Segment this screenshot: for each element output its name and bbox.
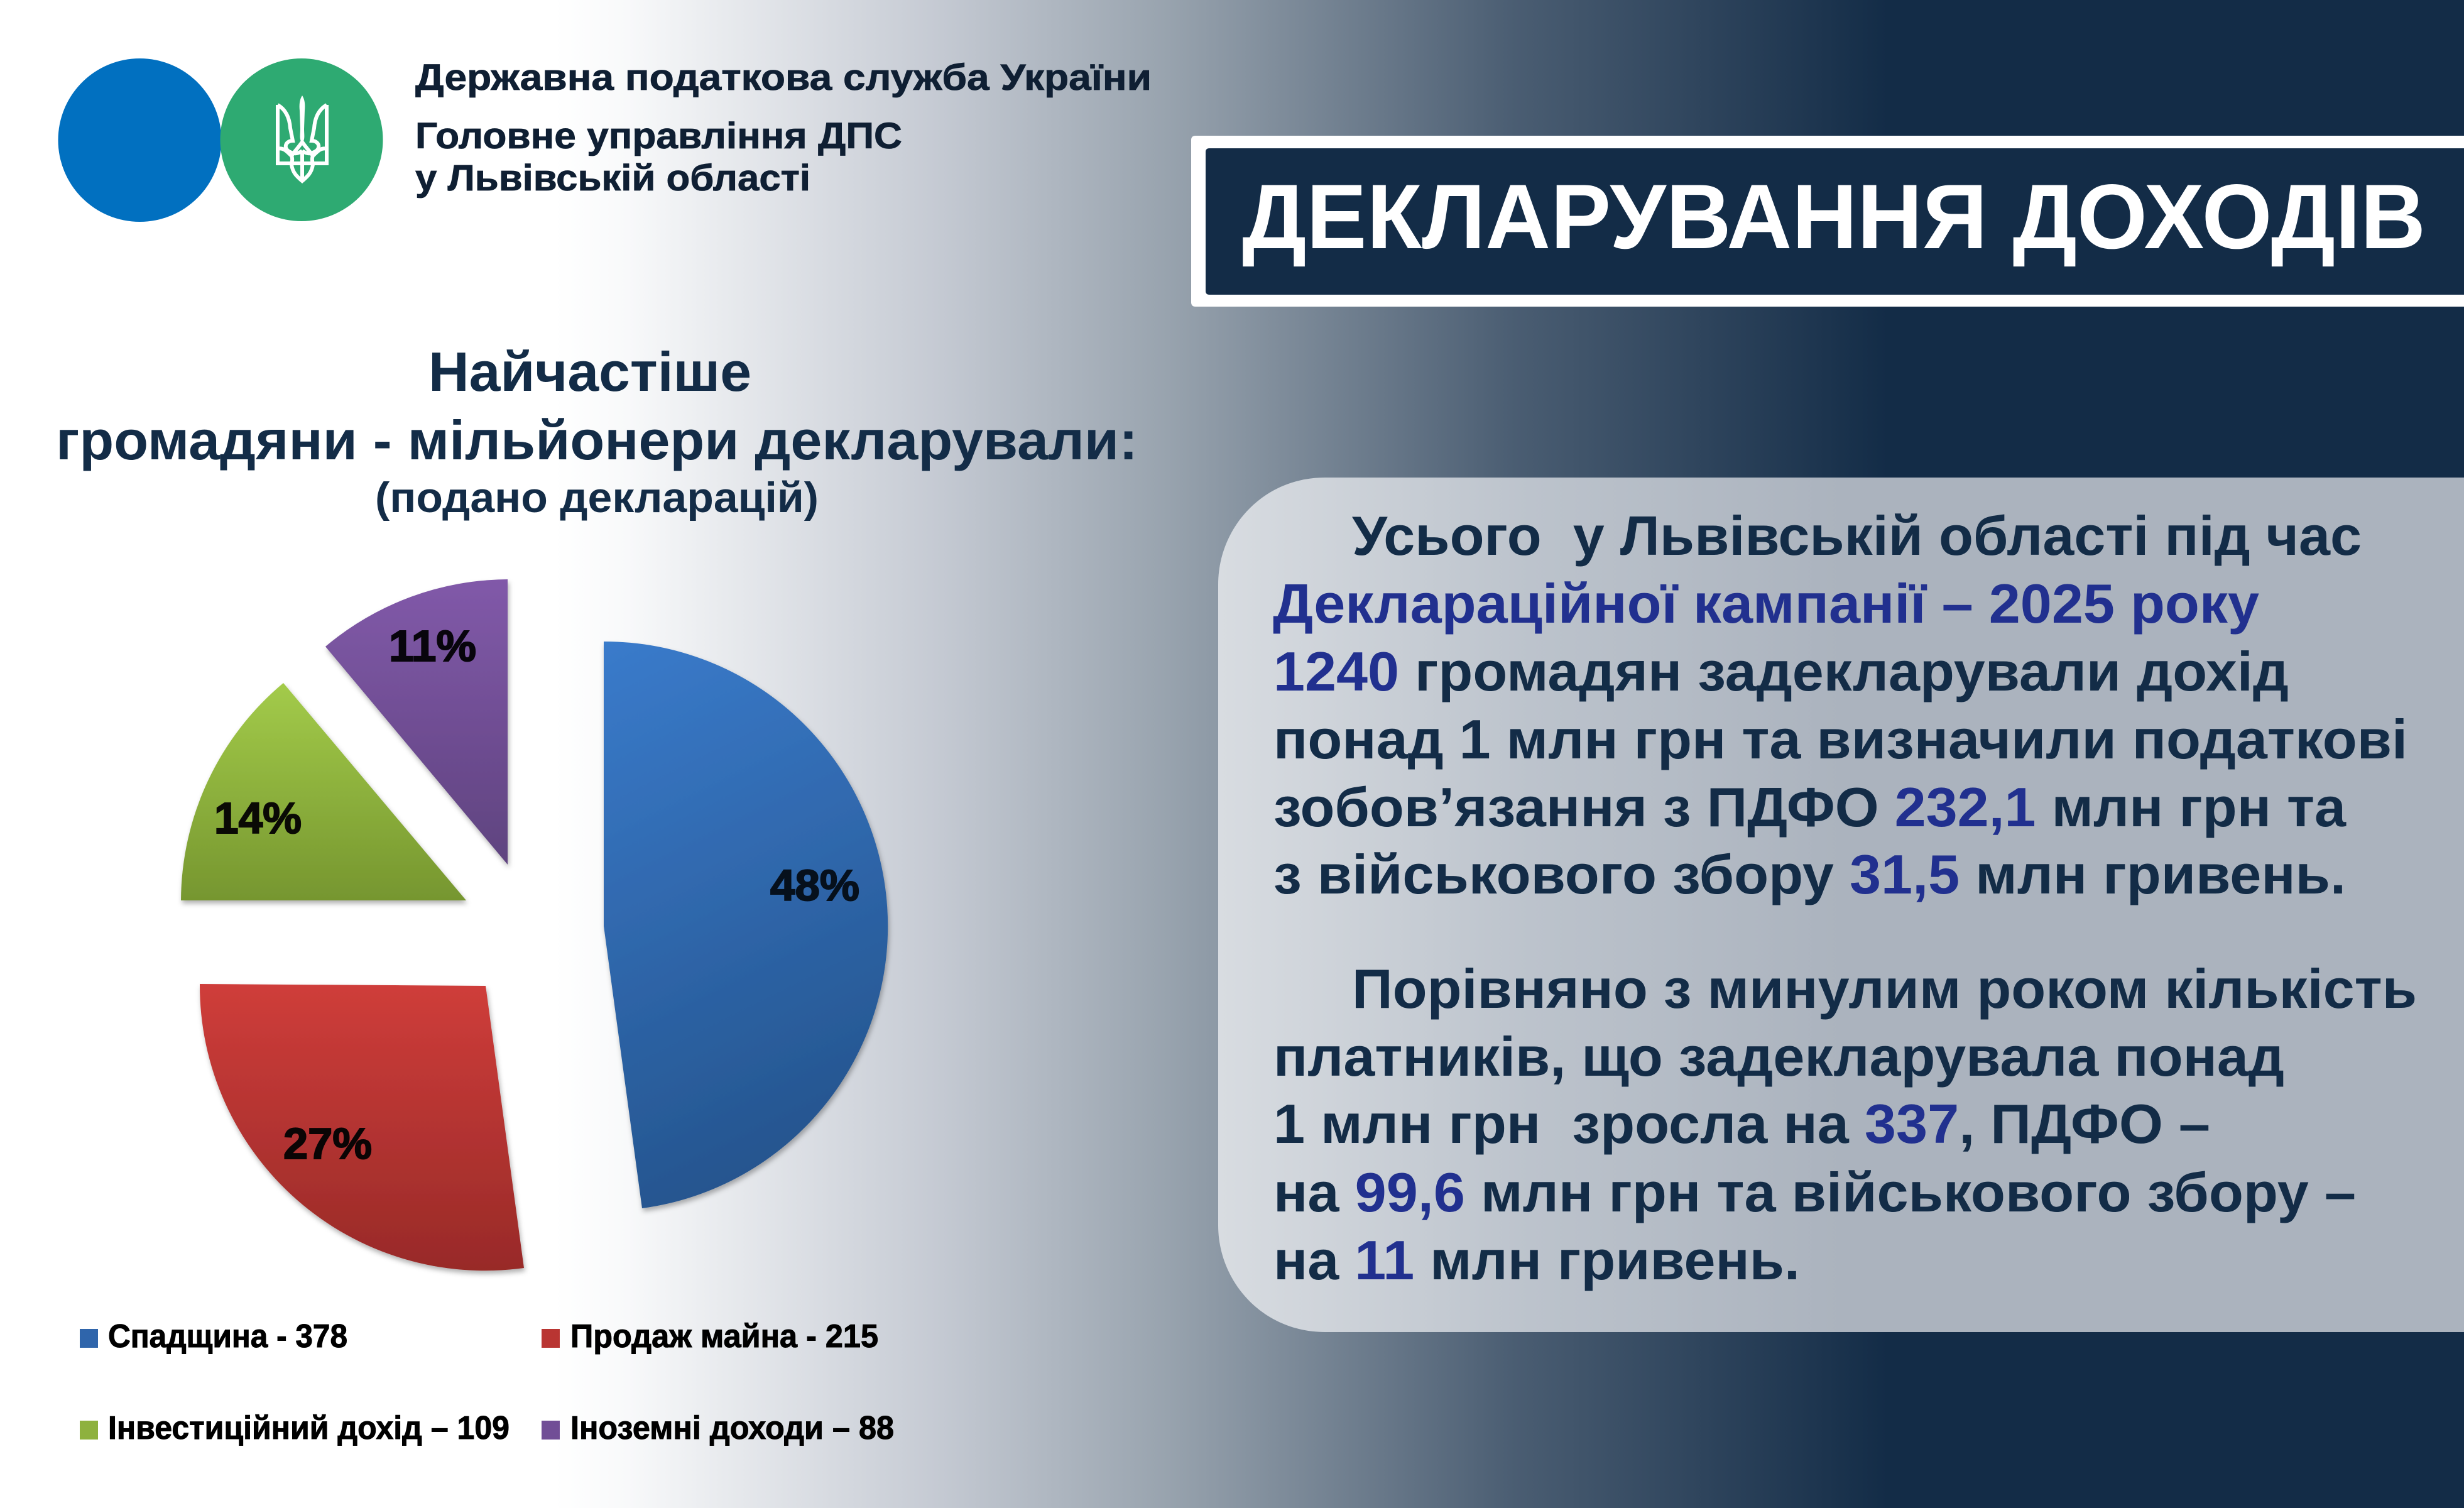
icon: trident (278, 96, 327, 181)
slice: investment income 14%: 14% (214, 794, 302, 843)
slice: property sale 27%: 27% (283, 1119, 372, 1168)
paragraph 2: 1 млн грн зросла на 337, ПДФО – (1273, 1093, 2210, 1155)
paragraph 2: на 11 млн гривень. (1273, 1229, 1800, 1291)
banner navy fill (1206, 148, 2464, 295)
paragraph 1: з військового збору 31,5 млн гривень. (1273, 843, 2346, 905)
organisation line 2: Головне управління ДПС (415, 116, 902, 156)
paragraph 2 (1273, 958, 2417, 1291)
pie chart (181, 579, 888, 1270)
paragraph 1: Усього у Львівській області під час (1352, 505, 2362, 567)
slice: foreign income 11% (325, 579, 508, 865)
paragraph 1: зобов’язання з ПДФО 232,1 млн грн та (1273, 776, 2347, 838)
slice: inheritance 48% (604, 642, 888, 1208)
legend: property sale: Продаж майна - 215 (570, 1318, 878, 1355)
paragraph 2: Порівняно з минулим роком кількість (1352, 958, 2417, 1020)
header: organisation name (415, 57, 1152, 199)
heading line 2: громадяни - мільйонери декларували: (56, 409, 1138, 471)
heading line 1: Найчастіше (428, 341, 751, 403)
slice: property sale 27% (200, 984, 524, 1270)
icon: blue circle (58, 58, 221, 222)
paragraph 2: на 99,6 млн грн та військового збору – (1273, 1161, 2356, 1223)
legend: investment income: Інвестиційний дохід – 109 (108, 1410, 510, 1446)
chart legend (80, 1318, 894, 1446)
title text: ДЕКЛАРУВАННЯ ДОХОДІВ (1242, 165, 2426, 268)
paragraph 1: понад 1 млн грн та визначили податкові (1273, 708, 2407, 770)
logo (58, 58, 383, 222)
heading line 3: (подано декларацій) (375, 474, 819, 522)
paragraph 1: 1240 громадян задекларували дохід (1273, 640, 2289, 702)
banner white frame (1191, 136, 2464, 307)
organisation line 3: у Львівській області (415, 158, 810, 199)
icon: green circle (220, 58, 383, 221)
slice: investment income 14% (181, 683, 466, 900)
paragraph 1: Деклараційної кампанії – 2025 року (1273, 572, 2259, 635)
panel background (1218, 478, 2464, 1332)
title banner (1191, 136, 2464, 307)
slice: inheritance 48%: 48% (770, 861, 859, 910)
legend: foreign income: Іноземні доходи – 88 (570, 1410, 894, 1446)
paragraph 2: платників, що задекларувала понад (1273, 1025, 2284, 1088)
paragraph 1 (1273, 505, 2407, 905)
slice: foreign income 11%: 11% (389, 621, 476, 670)
organisation line 1: Державна податкова служба України (415, 57, 1152, 98)
legend: inheritance: Спадщина - 378 (108, 1318, 347, 1355)
chart heading (56, 341, 1138, 522)
info panel (1218, 478, 2464, 1332)
